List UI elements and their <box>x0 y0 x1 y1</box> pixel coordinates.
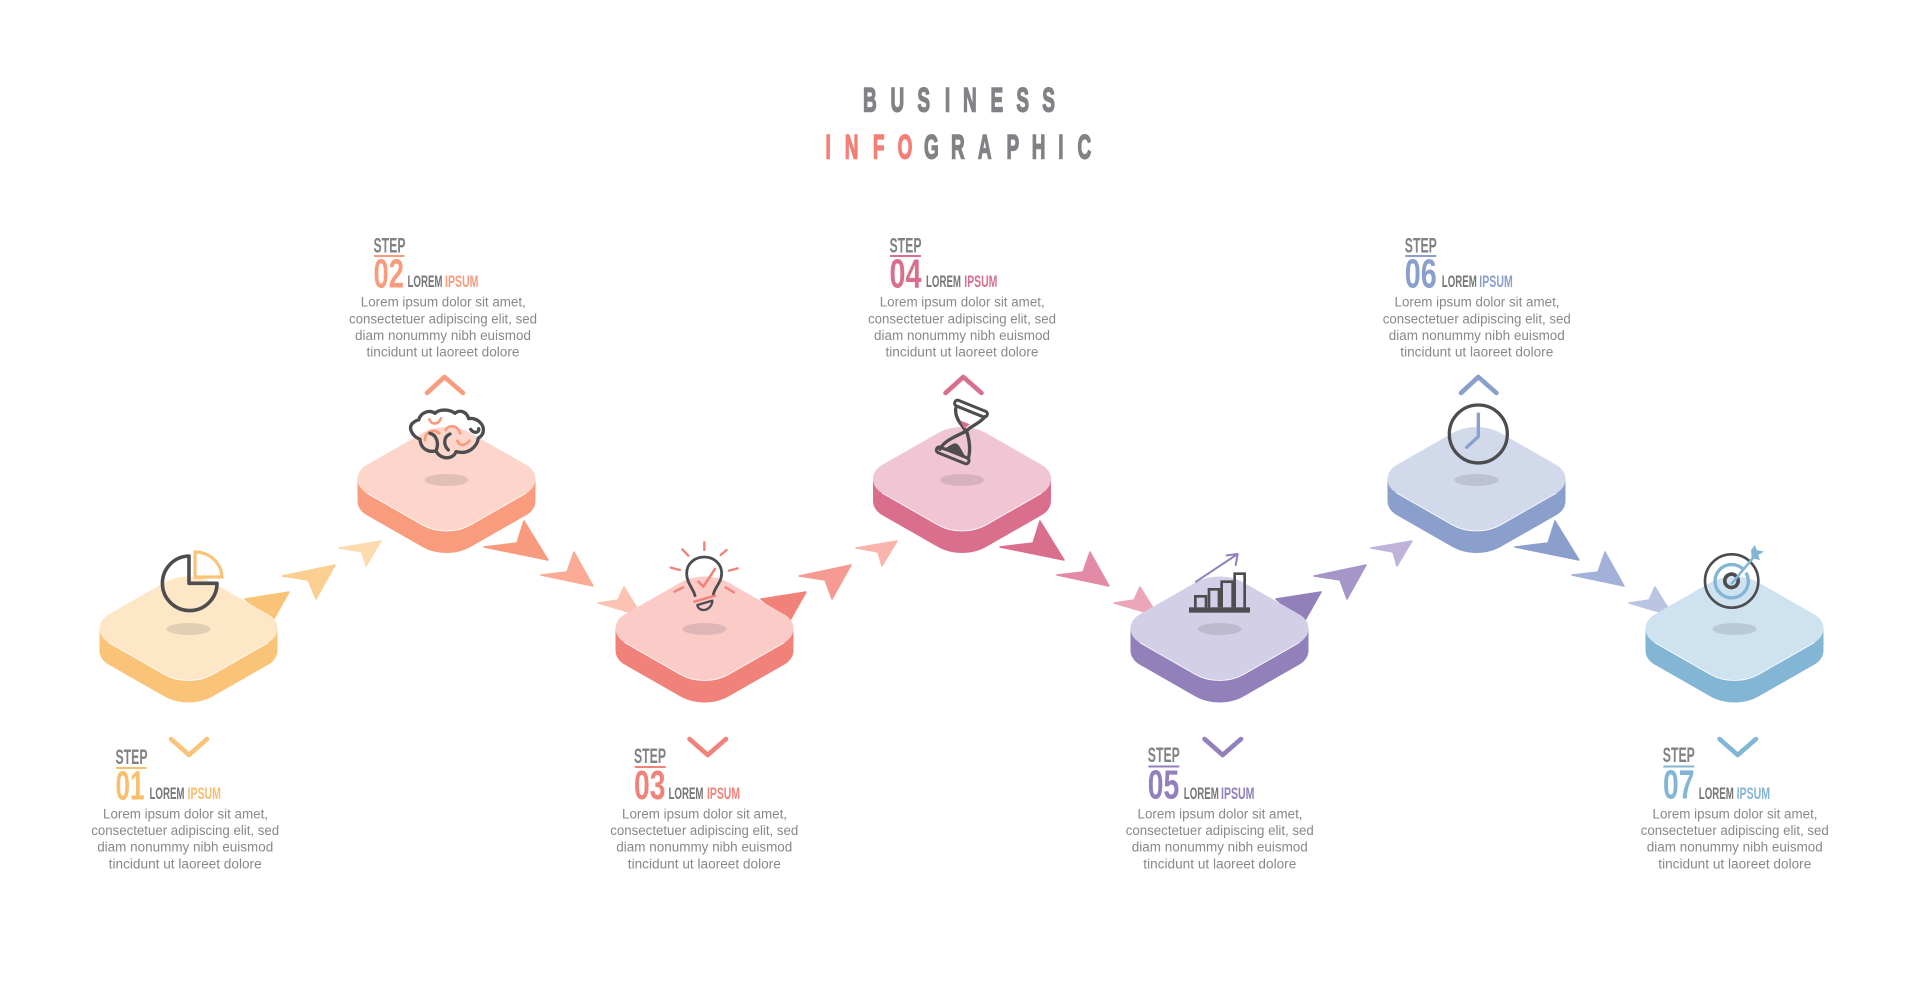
platform: step 1 <box>100 576 278 702</box>
text block: step 3: diam nonummy nibh euismod <box>616 840 792 855</box>
icon: pie chart <box>162 552 222 611</box>
title line: BUSINESS: BUSINESS <box>863 80 1055 119</box>
text block: step 1: STEP <box>116 746 148 769</box>
title line: INFOGRAPHIC: INFO GRAPHIC <box>826 127 1091 166</box>
text block: step 5 <box>1126 744 1314 871</box>
platform: step 7 <box>1646 576 1824 702</box>
text block: step 6: consectetuer adipiscing elit, sed <box>1383 311 1571 326</box>
text block: step 6: LOREM <box>1442 272 1477 291</box>
platform: step 5 <box>1130 576 1308 702</box>
platform: step 3 <box>616 576 794 702</box>
text block: step 5: diam nonummy nibh euismod <box>1132 840 1308 855</box>
text block: step 4: consectetuer adipiscing elit, sed <box>868 311 1056 326</box>
text block: step 3: tincidunt ut laoreet dolore <box>628 856 781 871</box>
icon: brain <box>411 410 483 458</box>
text block: step 1: tincidunt ut laoreet dolore <box>109 856 262 871</box>
text block: step 5: Lorem ipsum dolor sit amet, <box>1138 806 1302 821</box>
text block: step 2: Lorem ipsum dolor sit amet, <box>361 294 526 309</box>
text block: step 3: 03 <box>634 762 666 808</box>
text block: step 6: 06 <box>1405 250 1437 296</box>
text block: step 1: Lorem ipsum dolor sit amet, <box>103 806 268 821</box>
arrows: step 3 to step 4 <box>761 541 897 622</box>
chevron: step 6 <box>1461 377 1496 393</box>
icon: clock <box>1449 405 1507 463</box>
text block: step 5: 05 <box>1148 761 1179 807</box>
platform: step 4 <box>873 427 1051 553</box>
text block: step 1: consectetuer adipiscing elit, sed <box>91 823 279 838</box>
icon: target with arrow <box>1705 545 1764 608</box>
icon: light bulb <box>671 542 738 610</box>
text block: step 4: Lorem ipsum dolor sit amet, <box>880 294 1045 309</box>
text block: step 3: consectetuer adipiscing elit, sed <box>610 823 798 838</box>
chevron: step 3 <box>690 739 726 755</box>
text block: step 7: STEP <box>1663 744 1695 767</box>
text block: step 5: consectetuer adipiscing elit, sed <box>1126 823 1314 838</box>
chevron: step 4 <box>946 377 982 393</box>
text block: step 4: LOREM <box>926 272 961 291</box>
text block: step 3: STEP <box>634 745 666 768</box>
text block: step 6: IPSUM <box>1479 272 1513 291</box>
text block: step 2: LOREM <box>408 272 442 291</box>
text block: step 1: LOREM <box>150 784 184 803</box>
text block: step 4: IPSUM <box>964 272 997 291</box>
text block: step 6: diam nonummy nibh euismod <box>1389 328 1565 343</box>
text block: step 6 <box>1383 235 1571 360</box>
text block: step 7 <box>1641 744 1829 871</box>
text block: step 4: STEP <box>890 235 922 258</box>
text block: step 6: tincidunt ut laoreet dolore <box>1400 345 1553 360</box>
chevron: step 1 <box>171 739 207 755</box>
text block: step 6: STEP <box>1405 235 1437 258</box>
arrows: step 5 to step 6 <box>1276 541 1412 622</box>
icon: bar chart with arrow <box>1189 554 1250 613</box>
text block: step 2: STEP <box>374 235 406 258</box>
text block: step 5: tincidunt ut laoreet dolore <box>1143 856 1296 871</box>
text block: step 1: IPSUM <box>188 784 221 803</box>
text block: step 7: 07 <box>1663 761 1694 807</box>
text block: step 4: tincidunt ut laoreet dolore <box>886 345 1038 360</box>
text block: step 5: STEP <box>1148 744 1180 767</box>
arrows: step 2 to step 3 <box>484 521 642 616</box>
text block: step 4: 04 <box>890 250 922 296</box>
text block: step 5: IPSUM <box>1221 784 1254 803</box>
text block: step 1: diam nonummy nibh euismod <box>97 840 273 855</box>
arrows: step 6 to step 7 <box>1515 521 1673 616</box>
platform: step 2 <box>358 427 536 553</box>
text block: step 7: tincidunt ut laoreet dolore <box>1658 856 1811 871</box>
text block: step 7: consectetuer adipiscing elit, sed <box>1641 823 1829 838</box>
arrows: step 4 to step 5 <box>1000 521 1158 616</box>
text block: step 2: 02 <box>374 250 404 296</box>
chevron: step 7 <box>1720 739 1756 755</box>
chevron: step 5 <box>1204 739 1241 755</box>
text block: step 7: IPSUM <box>1737 784 1770 803</box>
text block: step 2 <box>349 235 537 360</box>
text block: step 1 <box>91 746 279 871</box>
text block: step 7: LOREM <box>1699 784 1734 803</box>
text block: step 2: consectetuer adipiscing elit, sed <box>349 311 537 326</box>
title <box>826 80 1091 166</box>
text block: step 3: IPSUM <box>707 784 740 803</box>
text block: step 3: Lorem ipsum dolor sit amet, <box>622 806 787 821</box>
text block: step 2: diam nonummy nibh euismod <box>355 328 531 343</box>
text block: step 6: Lorem ipsum dolor sit amet, <box>1394 294 1560 309</box>
text block: step 4: diam nonummy nibh euismod <box>874 328 1050 343</box>
arrows: step 1 to step 2 <box>245 541 381 622</box>
text block: step 7: diam nonummy nibh euismod <box>1647 840 1823 855</box>
text block: step 2: tincidunt ut laoreet dolore <box>366 345 520 360</box>
text block: step 3 <box>610 745 798 871</box>
text block: step 7: Lorem ipsum dolor sit amet, <box>1652 806 1818 821</box>
platform: step 6 <box>1388 427 1566 553</box>
chevron: step 2 <box>427 377 463 393</box>
icon: hourglass <box>935 399 988 465</box>
text block: step 1: 01 <box>116 762 144 808</box>
text block: step 2: IPSUM <box>445 272 478 291</box>
text block: step 3: LOREM <box>668 784 704 803</box>
text block: step 5: LOREM <box>1184 784 1219 803</box>
text block: step 4 <box>868 235 1056 360</box>
